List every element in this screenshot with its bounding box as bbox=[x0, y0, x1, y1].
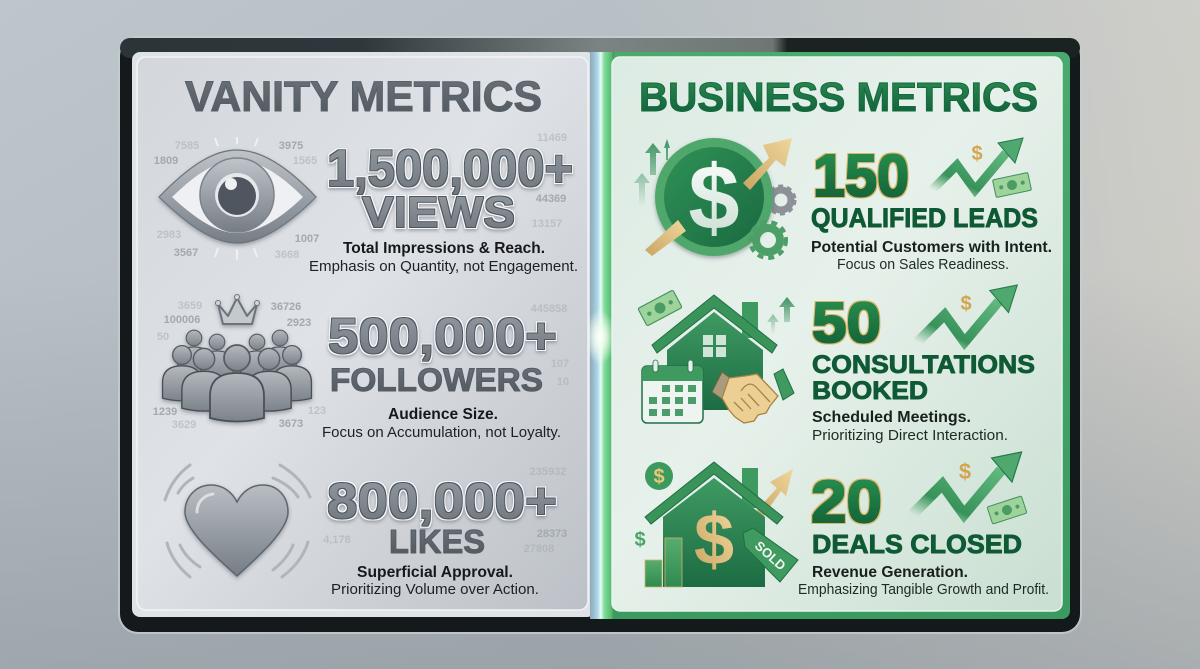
icon: sold house bbox=[634, 462, 798, 587]
handshake bbox=[712, 369, 794, 423]
heading: vanity metrics: VANITY METRICS bbox=[185, 73, 542, 121]
icon: trend arrow 3 bbox=[912, 452, 1027, 524]
metric: consultations booked: Scheduled Meetings. bbox=[812, 409, 971, 426]
metric: likes: Superficial Approval. bbox=[357, 564, 513, 581]
heading: business metrics: BUSINESS METRICS bbox=[639, 74, 1038, 120]
ghost numbers: 27808 bbox=[524, 543, 554, 555]
panel background bbox=[612, 57, 1062, 611]
metric: views bbox=[309, 140, 578, 275]
ghost numbers: 3567 bbox=[174, 247, 198, 259]
metric: deals closed: 20 bbox=[811, 469, 882, 535]
calendar bbox=[642, 360, 703, 423]
ghost numbers: 1007 bbox=[295, 233, 319, 245]
device frame bbox=[118, 36, 1082, 634]
metric: qualified leads: Potential Customers with Intent. bbox=[811, 239, 1052, 256]
ghost numbers: 107 bbox=[551, 358, 569, 370]
icon: dollar coin with arrow and gears: $ bbox=[688, 147, 740, 249]
icon: sold house: $ bbox=[634, 529, 646, 551]
ghost numbers: 1809 bbox=[154, 155, 178, 167]
ghost numbers: 1239 bbox=[153, 406, 177, 418]
ghost numbers: 44369 bbox=[536, 193, 566, 205]
icon: trend arrow 2: $ bbox=[960, 293, 972, 315]
ghost numbers: 1565 bbox=[293, 155, 317, 167]
ghost numbers: 123 bbox=[308, 405, 326, 417]
metric: likes: Prioritizing Volume over Action. bbox=[331, 581, 539, 598]
ghost numbers: 100006 bbox=[164, 314, 200, 326]
metric: deals closed: DEALS CLOSED bbox=[812, 529, 1022, 559]
metric: followers bbox=[322, 308, 561, 441]
metric: qualified leads: 150 bbox=[813, 143, 909, 209]
ghost numbers: 3975 bbox=[279, 140, 303, 152]
icon: trend arrow 2 bbox=[917, 285, 1017, 342]
metric: consultations booked: BOOKED bbox=[812, 377, 928, 405]
metric: followers: Audience Size. bbox=[388, 406, 498, 423]
metric: likes: 800,000+ bbox=[327, 473, 557, 529]
ghost numbers: 50 bbox=[157, 331, 169, 343]
icon: audience group bbox=[163, 330, 311, 422]
center glow divider bbox=[585, 52, 615, 619]
ghost numbers: 28373 bbox=[537, 528, 567, 540]
metric: deals closed bbox=[798, 469, 1049, 598]
icon: heart bbox=[165, 465, 310, 577]
icon: sold house: $ bbox=[694, 500, 734, 580]
metric: views: Emphasis on Quantity, not Engagement. bbox=[309, 258, 578, 275]
icon: dollar coin with arrow and gears bbox=[634, 138, 795, 258]
ghost numbers bbox=[153, 132, 569, 555]
metric: followers: 500,000+ bbox=[328, 308, 557, 364]
ghost numbers: 7585 bbox=[175, 140, 199, 152]
metric: qualified leads: Focus on Sales Readiness. bbox=[837, 256, 1009, 273]
ghost numbers: 2983 bbox=[157, 229, 181, 241]
ghost numbers: 2923 bbox=[287, 317, 311, 329]
metric: followers: FOLLOWERS bbox=[330, 362, 543, 398]
metric: views: 1,500,000+ bbox=[327, 140, 573, 198]
metric: qualified leads bbox=[811, 143, 1052, 273]
icon: trend arrow 1: $ bbox=[971, 143, 983, 165]
metric: consultations booked: 50 bbox=[812, 291, 881, 355]
ghost numbers: 235932 bbox=[530, 466, 566, 478]
ghost numbers: 4,178 bbox=[323, 534, 351, 546]
metric: consultations booked bbox=[812, 291, 1035, 444]
metric: qualified leads: QUALIFIED LEADS bbox=[811, 203, 1038, 233]
icon: trend arrow 1 bbox=[932, 138, 1031, 198]
icon: sold house: SOLD bbox=[752, 538, 789, 573]
ghost numbers: 36726 bbox=[271, 301, 301, 313]
ghost numbers: 11469 bbox=[537, 132, 567, 144]
metric: consultations booked: CONSULTATIONS bbox=[812, 351, 1035, 379]
panel: vanity metrics bbox=[137, 57, 588, 610]
ghost numbers: 3673 bbox=[279, 418, 303, 430]
metric: views: Total Impressions & Reach. bbox=[343, 240, 545, 257]
metric: deals closed: Revenue Generation. bbox=[812, 564, 968, 581]
icon: trend arrow 3: $ bbox=[959, 459, 971, 484]
icon: eye bbox=[159, 137, 316, 260]
icon: crown bbox=[216, 294, 260, 324]
icon: house with calendar and handshake bbox=[638, 290, 795, 423]
panel background bbox=[137, 57, 588, 610]
metric: likes bbox=[327, 473, 557, 598]
ghost numbers: 445858 bbox=[531, 303, 567, 315]
metric: followers: Focus on Accumulation, not Loyalty. bbox=[322, 424, 561, 441]
metric: deals closed: Emphasizing Tangible Growth and Profit. bbox=[798, 581, 1049, 598]
ghost numbers: 3668 bbox=[275, 249, 299, 261]
ghost numbers: 3659 bbox=[178, 300, 202, 312]
ghost numbers: 3629 bbox=[172, 419, 196, 431]
ghost numbers: 10 bbox=[557, 376, 569, 388]
metric: views: VIEWS bbox=[362, 188, 515, 237]
panel: business metrics bbox=[612, 57, 1062, 611]
ghost numbers: 13157 bbox=[532, 218, 562, 230]
metric: consultations booked: Prioritizing Direct Interaction. bbox=[812, 427, 1008, 444]
icon: sold house: $ bbox=[653, 466, 665, 488]
metric: likes: LIKES bbox=[389, 523, 485, 560]
